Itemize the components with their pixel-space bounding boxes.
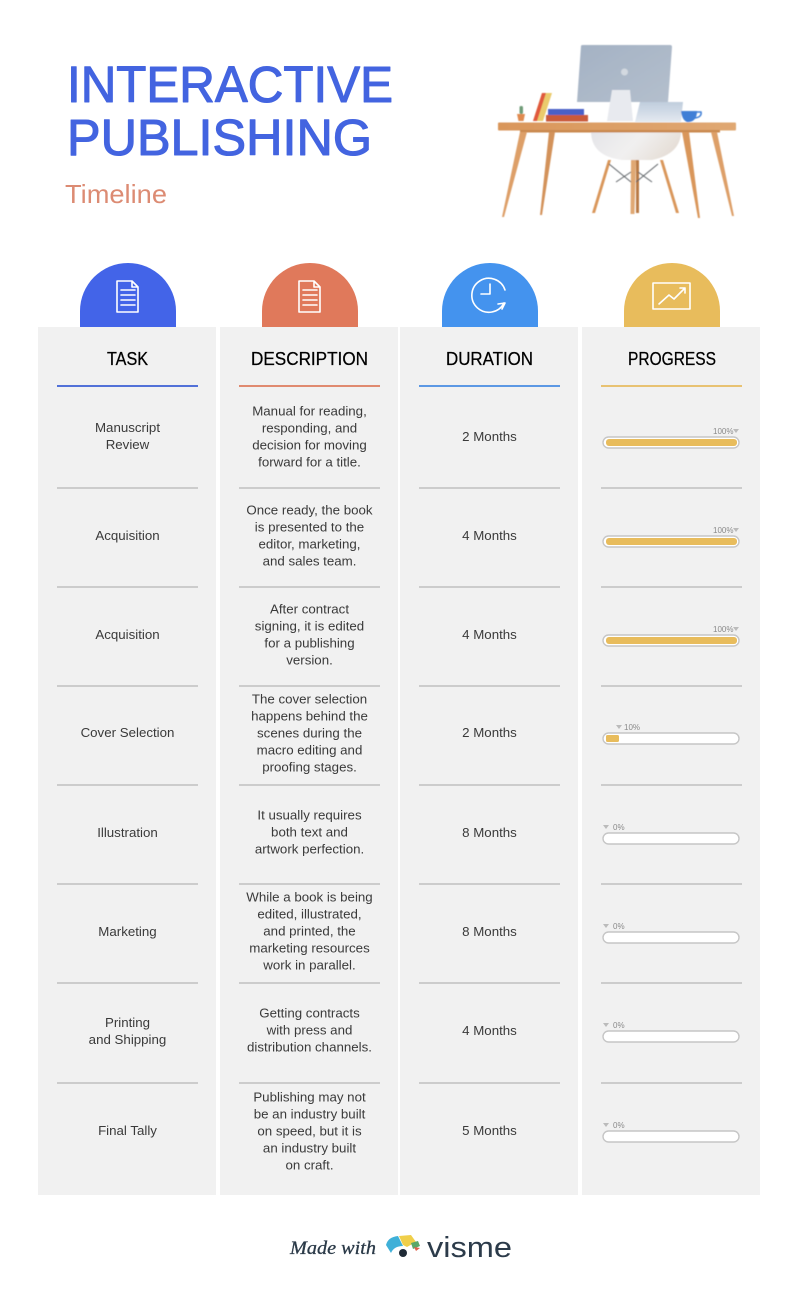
descriptions: both text and bbox=[271, 824, 348, 840]
progress bar: manuscript review 100%: 100% bbox=[713, 427, 733, 436]
durations: 8 Months bbox=[462, 924, 517, 939]
descriptions: While a book is being bbox=[246, 890, 373, 904]
progress bar: final tally 0%: 0% bbox=[613, 1121, 625, 1130]
descriptions: happens behind the bbox=[251, 708, 368, 724]
panel: description column bbox=[220, 327, 398, 1195]
descriptions: artwork perfection. bbox=[255, 842, 364, 856]
panel: progress column bbox=[582, 327, 760, 1195]
task names: and Shipping bbox=[89, 1032, 166, 1047]
descriptions: and sales team. bbox=[263, 554, 356, 568]
progress bar: printing and shipping 0% bbox=[603, 1021, 739, 1042]
descriptions: scenes during the bbox=[257, 726, 362, 740]
descriptions bbox=[246, 404, 373, 1172]
descriptions: with press and bbox=[266, 1022, 352, 1038]
descriptions: be an industry built bbox=[254, 1106, 366, 1122]
title bbox=[67, 56, 393, 166]
icon tab: progress bbox=[624, 263, 720, 327]
title: INTERACTIVE bbox=[67, 56, 393, 113]
descriptions: Once ready, the book bbox=[246, 502, 373, 518]
icon tab: task bbox=[80, 263, 176, 327]
column headings: TASK bbox=[107, 349, 148, 369]
task names: Cover Selection bbox=[81, 725, 174, 740]
descriptions: marketing resources bbox=[249, 940, 370, 956]
progress bar: illustration 0%: 0% bbox=[613, 823, 625, 832]
task names: Marketing bbox=[98, 924, 157, 939]
task names: Manuscript bbox=[95, 420, 160, 435]
descriptions: edited, illustrated, bbox=[257, 906, 362, 922]
task names: Acquisition bbox=[95, 627, 160, 642]
icon tab: duration bbox=[442, 263, 538, 327]
footer: made with visme bbox=[289, 1232, 512, 1264]
descriptions: work in parallel. bbox=[262, 958, 356, 972]
column headings: DESCRIPTION bbox=[251, 349, 368, 369]
durations: 4 Months bbox=[462, 1023, 517, 1038]
progress bar: final tally 0% bbox=[603, 1121, 739, 1142]
subtitle: Timeline bbox=[65, 179, 167, 209]
column headings bbox=[107, 349, 716, 369]
descriptions: on craft. bbox=[285, 1158, 334, 1172]
task names: Final Tally bbox=[98, 1123, 157, 1138]
durations: 2 Months bbox=[462, 725, 517, 740]
descriptions: is presented to the bbox=[255, 520, 364, 534]
progress bar: cover selection 10% bbox=[603, 723, 739, 744]
descriptions: Publishing may not bbox=[253, 1090, 366, 1104]
illustration: desk with monitor, chair and books bbox=[498, 45, 736, 218]
descriptions: distribution channels. bbox=[247, 1040, 372, 1054]
progress bar: acquisition 100%: 100% bbox=[713, 526, 733, 535]
descriptions: and printed, the bbox=[263, 924, 356, 938]
footer: made with visme: Made with bbox=[289, 1238, 376, 1259]
descriptions: signing, it is edited bbox=[255, 618, 364, 634]
panel: duration column bbox=[400, 327, 578, 1195]
descriptions: Manual for reading, bbox=[252, 404, 367, 418]
progress bar: manuscript review 100% bbox=[603, 427, 739, 448]
progress bar: cover selection 10%: 10% bbox=[624, 723, 640, 732]
durations: 5 Months bbox=[462, 1123, 517, 1138]
task names: Acquisition bbox=[95, 528, 160, 543]
descriptions: It usually requires bbox=[257, 808, 362, 822]
descriptions: an industry built bbox=[263, 1140, 356, 1156]
progress bar: acquisition 100% bbox=[603, 526, 739, 547]
descriptions: on speed, but it is bbox=[257, 1124, 362, 1138]
progress bar: acquisition second 100%: 100% bbox=[713, 625, 733, 634]
durations: 4 Months bbox=[462, 627, 517, 642]
durations: 4 Months bbox=[462, 528, 517, 543]
task names: Review bbox=[106, 437, 150, 452]
column headings: PROGRESS bbox=[628, 349, 716, 369]
descriptions: editor, marketing, bbox=[258, 536, 360, 552]
descriptions: proofing stages. bbox=[262, 760, 357, 774]
descriptions: for a publishing bbox=[264, 636, 355, 650]
panel: task column bbox=[38, 327, 216, 1195]
descriptions: Getting contracts bbox=[259, 1006, 360, 1020]
icon tab: description bbox=[262, 263, 358, 327]
descriptions: The cover selection bbox=[252, 692, 367, 706]
descriptions: forward for a title. bbox=[258, 454, 361, 470]
task names: Printing bbox=[105, 1015, 150, 1030]
progress bar: marketing 0% bbox=[603, 922, 739, 943]
durations bbox=[462, 429, 517, 1138]
progress bar: illustration 0% bbox=[603, 823, 739, 844]
durations: 2 Months bbox=[462, 429, 517, 444]
durations: 8 Months bbox=[462, 825, 517, 840]
descriptions: After contract bbox=[270, 602, 349, 616]
progress bar: marketing 0%: 0% bbox=[613, 922, 625, 931]
column headings: DURATION bbox=[446, 349, 533, 369]
progress bar: acquisition second 100% bbox=[603, 625, 739, 646]
descriptions: version. bbox=[286, 652, 333, 668]
title: PUBLISHING bbox=[67, 109, 372, 166]
footer: made with visme: visme bbox=[427, 1232, 512, 1264]
descriptions: macro editing and bbox=[257, 742, 362, 758]
descriptions: decision for moving bbox=[252, 438, 367, 452]
progress bar: printing and shipping 0%: 0% bbox=[613, 1021, 625, 1030]
descriptions: responding, and bbox=[262, 420, 357, 436]
task names: Illustration bbox=[97, 825, 158, 840]
task names bbox=[81, 420, 174, 1138]
